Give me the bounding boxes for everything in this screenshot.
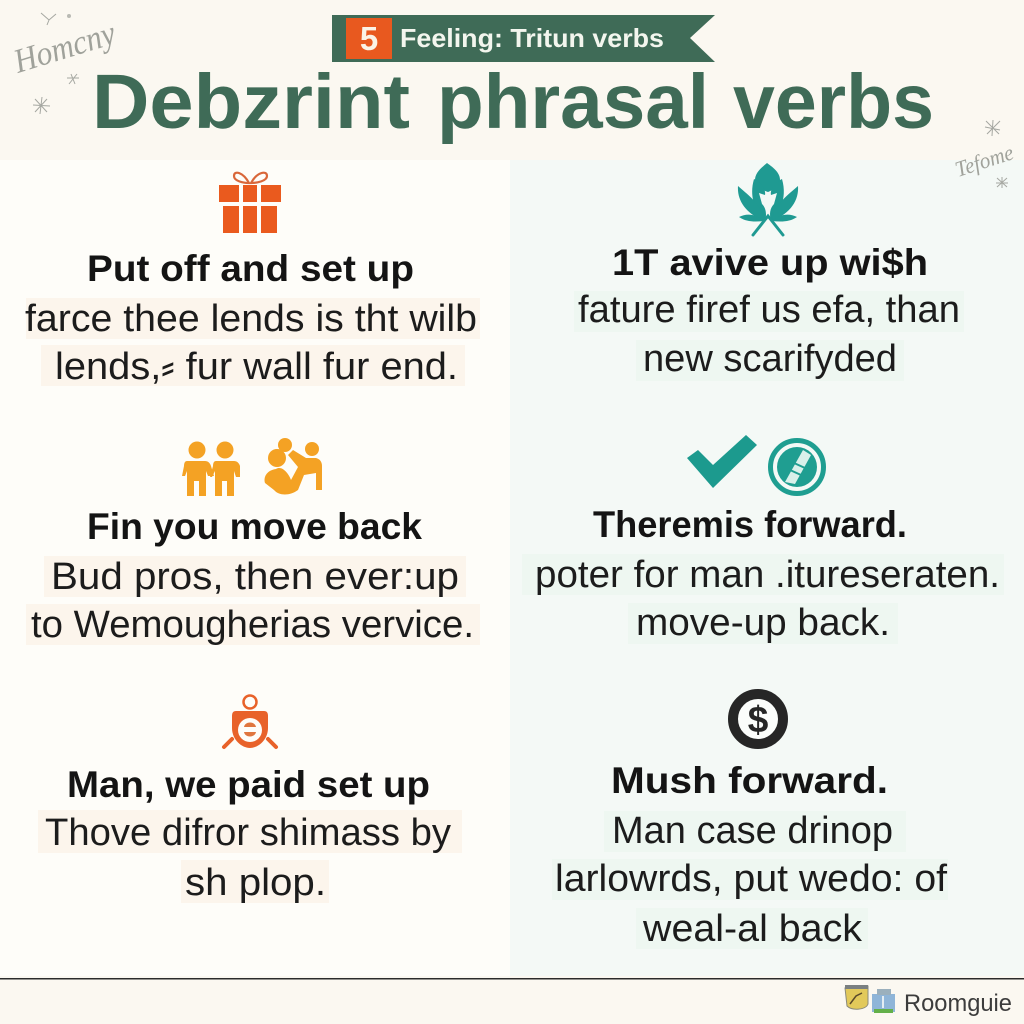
number badge: 5 [360,20,378,57]
item 4: avive up wish [574,163,964,381]
panel: left column [0,160,510,976]
description: poter for man .ituresеraten. [535,554,1000,596]
handwritten note: top left: Homcny [9,15,121,81]
handwritten note: top left [9,13,121,114]
heading: Man, we paid set up [67,764,430,805]
description [26,556,480,646]
description: weal-al back [642,908,863,950]
heading: Mush forward. [611,760,888,801]
heading: Fin you move back [87,506,422,547]
icon: teal leaf [738,163,798,235]
icon: round bot [224,696,276,748]
title: Debzrint [92,59,410,145]
description [38,810,462,904]
description: lends,⸗ fur wall fur end. [55,346,458,388]
description: fature firef us efa, than [578,289,960,331]
panel: right column [510,160,1024,976]
title: phrasal [437,59,709,145]
icon: dollar coin: $ [748,699,769,740]
title: verbs [733,59,934,145]
description: Bud pros, then ever:up [51,556,459,598]
brand name: Roomguie [904,990,1012,1017]
description: move-up back. [636,602,890,644]
description: Thove difror shimass by [45,812,451,854]
item 2: fin you move back [26,438,480,646]
description [574,289,964,381]
description: new scarifyded [643,338,897,380]
icon: dollar coin [733,694,783,744]
icon: logo marks [845,985,895,1013]
heading: 1T avive up wi$h [612,242,928,283]
handwritten note: top right: Tefome [952,139,1017,182]
heading: Theremis forward. [593,504,907,545]
icon: check mark [687,435,757,488]
icon: round badge [770,440,824,494]
item 3: man, we paid set up [38,696,462,904]
description: larlowrds, put wedo: of [555,858,947,900]
item 6: mush forward [552,694,948,950]
heading: Put off and set up [87,248,414,289]
description: sh plop. [185,862,326,904]
banner ribbon [332,15,715,62]
footer rule [0,978,1024,980]
icon: people [182,438,322,496]
description: farce thee lends is tht wilb [25,298,477,340]
description: Man case drinop [612,810,893,852]
number badge [346,18,392,59]
description [25,298,480,388]
banner text: Feeling: Tritun verbs [400,23,664,53]
icon: gift [219,173,281,233]
item 1: put off and set up [25,173,480,388]
title [92,59,934,145]
item 5: theremis forward [522,435,1004,644]
description: to Wemougherias vervice. [31,604,474,646]
footer logo [845,985,1012,1017]
description [522,554,1004,644]
handwritten note: top right [952,120,1017,188]
description [552,810,948,950]
